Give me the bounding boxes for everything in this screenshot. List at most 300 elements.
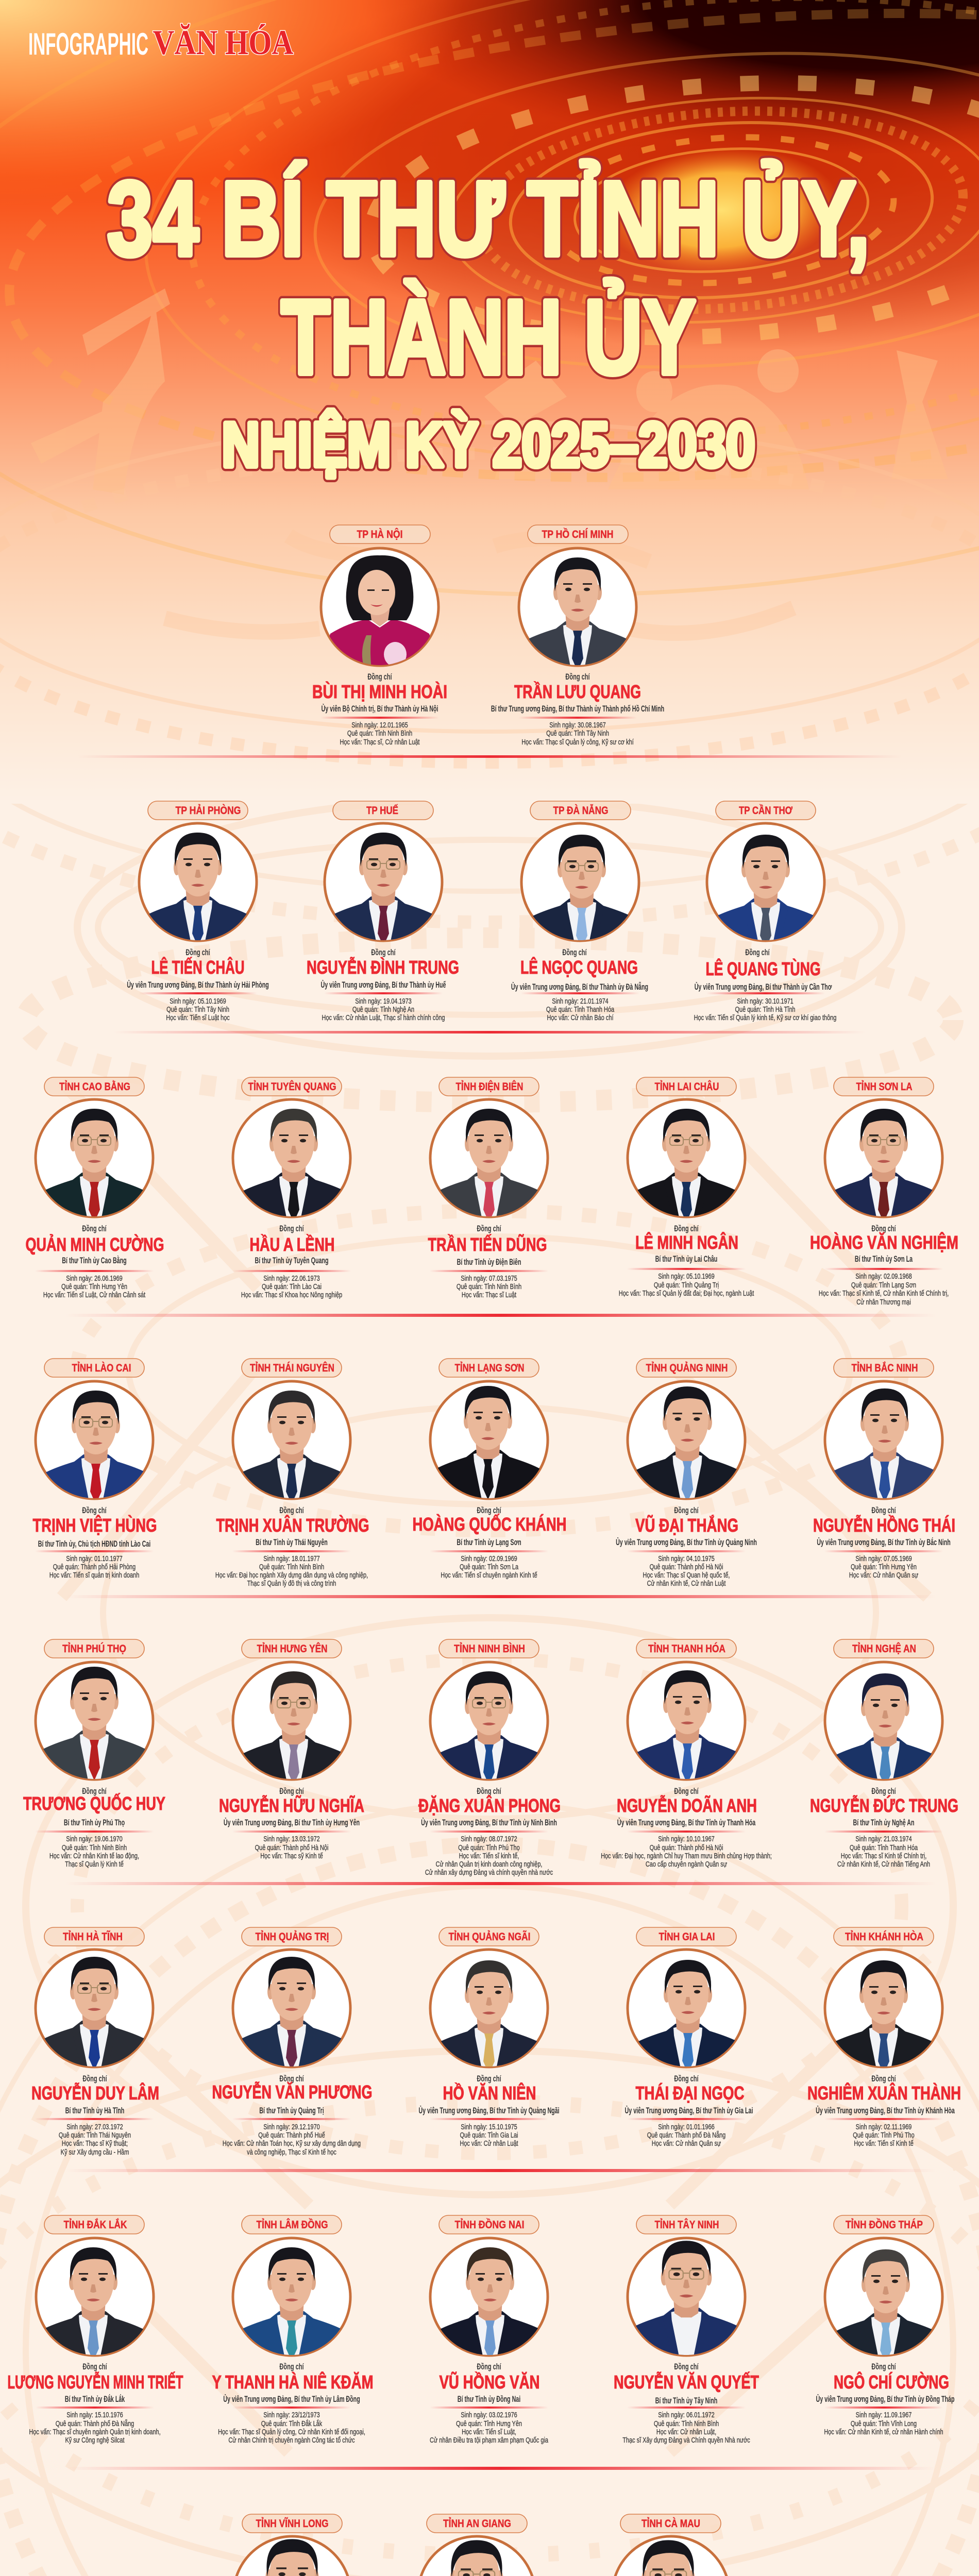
bio: [853, 2122, 915, 2147]
name: [636, 2074, 744, 2104]
bio: Sinh ngày: 19.04.1973: [355, 996, 412, 1005]
pill: TỈNH CÀ MAU: [642, 2518, 700, 2530]
role: Ủy viên Trung ương Đảng, Bí thư Thành ủy Đà Nẵng: [511, 981, 648, 992]
bio: Học vấn: Thạc sĩ Khoa học Nông nghiệp: [241, 1290, 342, 1299]
bio: [29, 2410, 161, 2444]
role: Bí thư Tỉnh ủy Lạng Sơn: [457, 1538, 521, 1548]
bio: [601, 1834, 772, 1868]
bio: Quê quán: Tỉnh Thanh Hóa: [546, 1005, 615, 1013]
bio: Học vấn: Cử nhân Quân sự: [652, 2139, 721, 2147]
pill: TỈNH TUYÊN QUANG: [248, 1080, 336, 1093]
pill: TỈNH TÂY NINH: [654, 2218, 719, 2231]
bio: Sinh ngày: 21.01.1974: [552, 996, 609, 1005]
bio: Sinh ngày: 12.01.1965: [351, 720, 408, 729]
pill: TỈNH VĨNH LONG: [256, 2518, 329, 2530]
role: Ủy viên Trung ương Đảng, Bí thư Tỉnh ủy Quảng Ninh: [616, 1536, 757, 1548]
panel: Tỉnh An Giang: [404, 2514, 549, 2576]
bio: Quê quán: Tỉnh Tây Ninh: [166, 1005, 229, 1013]
role: Bí thư Tỉnh ủy Phú Thọ: [64, 1818, 125, 1828]
pill: [636, 2215, 736, 2234]
pill: TỈNH BẮC NINH: [851, 1362, 918, 1374]
panel: TP Huế: [307, 801, 459, 1022]
bio: Sinh ngày: 07.03.1975: [461, 1274, 517, 1282]
portrait: [231, 2238, 352, 2361]
role: Ủy viên Trung ương Đảng, Bí thư Thành ủy Cần Thơ: [695, 981, 832, 992]
logo: Infographic Văn Hóa: VĂN HÓA: [153, 23, 294, 62]
bio: Học vấn: Cử nhân Quân sự: [849, 1570, 918, 1579]
name: Đồng chí: [82, 1787, 107, 1797]
background pattern: drum motifs: [0, 520, 979, 2576]
portrait: [33, 1950, 155, 2071]
panel: Tỉnh Vĩnh Long: [225, 2514, 359, 2576]
pill: TP ĐÀ NẴNG: [553, 805, 608, 817]
pill: [834, 1639, 934, 1658]
bio: Quê quán: Tỉnh Ninh Bình: [347, 728, 412, 737]
panel: Tỉnh Nghệ An: [810, 1639, 958, 1868]
portrait: [626, 1381, 749, 1502]
bio: [215, 1554, 368, 1587]
portrait: [427, 1381, 549, 1500]
pill: [148, 801, 248, 820]
role: Bí thư Tỉnh ủy Tuyên Quang: [255, 1256, 329, 1266]
role: Ủy viên Trung ương Đảng, Bí thư Tỉnh ủy Hưng Yên: [224, 1817, 360, 1828]
pill: TỈNH ĐỒNG NAI: [454, 2218, 525, 2231]
bio: [460, 2122, 518, 2147]
bio: Sinh ngày: 26.06.1969: [66, 1274, 123, 1282]
bio: Học vấn: Thạc sĩ Quan hệ quốc tế,: [643, 1570, 730, 1579]
bio: Sinh ngày: 08.07.1972: [461, 1834, 517, 1843]
bio: Sinh ngày: 29.12.1970: [263, 2122, 320, 2131]
bio: Học vấn: Cử nhân Báo chí: [547, 1013, 614, 1022]
logo: Infographic Văn Hóa: INFOGRAPHIC: [28, 27, 148, 61]
name: [216, 1506, 369, 1536]
pill: TP HỒ CHÍ MINH: [542, 528, 613, 540]
pill: [834, 2215, 934, 2234]
portrait: [225, 2536, 359, 2576]
bio: Sinh ngày: 22.06.1973: [263, 1274, 320, 1282]
pill: TP HẢI PHÒNG: [175, 804, 241, 817]
pill: TỈNH SƠN LA: [856, 1081, 912, 1093]
pill: TỈNH GIA LAI: [659, 1931, 715, 1943]
bio: Quê quán: Tỉnh Nghệ An: [352, 1005, 414, 1013]
bio: Sinh ngày: 21.03.1974: [855, 1834, 912, 1843]
pill: [242, 2514, 342, 2533]
role: Bí thư Tỉnh ủy Đồng Nai: [458, 2395, 520, 2404]
panel: Tỉnh Cà Mau: [601, 2514, 735, 2576]
portrait: [233, 1099, 355, 1223]
bio: Học vấn: Thạc sĩ Kinh tế, Cử nhân Kinh tế Chính trị,: [819, 1289, 949, 1297]
pill: [242, 1359, 342, 1377]
pill: [834, 1077, 934, 1096]
name: THÁI ĐẠI NGỌC: [636, 2082, 744, 2104]
bio: Quê quán: Thành phố Hải Phòng: [53, 1562, 136, 1571]
bio: Học vấn: Tiến sĩ kinh tế,: [459, 1851, 519, 1860]
name: Đồng chí: [279, 2362, 304, 2372]
bio: Quê quán: Tỉnh Lào Cai: [262, 1282, 322, 1291]
panel: TP Cần Thơ: [694, 801, 836, 1022]
panel: Tỉnh Tuyên Quang: [232, 1077, 355, 1299]
panel: Tỉnh Thái Nguyên: [215, 1359, 369, 1587]
bio: Học vấn: Thạc sĩ, Cử nhân Luật: [340, 737, 420, 746]
bio: Học vấn: Thạc sĩ Kinh tế Chính trị,: [841, 1851, 926, 1860]
bio: [837, 1834, 930, 1868]
bio: Học vấn: Thạc sĩ Quản lý công, Kỹ sư cơ khí: [521, 737, 634, 746]
pill: [834, 1359, 934, 1377]
name: Đồng chí: [82, 1506, 107, 1516]
name: Đồng chí: [477, 2074, 501, 2084]
portrait: [137, 823, 259, 946]
pill: TỈNH LÂM ĐỒNG: [257, 2218, 328, 2231]
panel: Tỉnh Khánh Hòa: [807, 1927, 961, 2147]
portrait: [627, 1662, 748, 1784]
portrait: [428, 1950, 550, 2074]
portrait: [622, 2238, 750, 2360]
role: Bí thư Tỉnh ủy Hà Tĩnh: [65, 2106, 124, 2116]
portrait: [35, 1381, 157, 1504]
role: Bí thư Tỉnh ủy Đắk Lắk: [65, 2393, 125, 2404]
panel: Tỉnh Cao Bằng: [26, 1077, 164, 1299]
pill: [636, 1077, 736, 1096]
bio: Sinh ngày: 27.03.1972: [66, 2122, 123, 2131]
bio: Sinh ngày: 05.10.1969: [658, 1272, 715, 1280]
panel: Tỉnh Lai Châu: [619, 1077, 754, 1297]
bio: Sinh ngày: 30.10.1971: [737, 996, 794, 1005]
bio: Học vấn: Thạc sĩ Quản lý đất đai; Đại học, ngành Luật: [619, 1289, 754, 1297]
bio: Sinh ngày: 11.09.1967: [856, 2410, 912, 2419]
bio: Quê quán: Thành phố Hà Nội: [255, 1843, 328, 1852]
bio: Quê quán: Tỉnh Hà Tĩnh: [735, 1005, 796, 1013]
name: LÊ NGỌC QUANG: [520, 956, 638, 978]
bio: Học vấn: Tiến sĩ Kinh tế: [854, 2139, 914, 2147]
name: [807, 2074, 961, 2104]
pill: TỈNH THÁI NGUYÊN: [250, 1362, 334, 1374]
bio: Sinh ngày: 30.08.1967: [549, 720, 606, 729]
portrait: [823, 1950, 944, 2074]
role: Ủy viên Trung ương Đảng, Bí thư Tỉnh ủy Gia Lai: [625, 2105, 753, 2116]
bio: Quê quán: Tỉnh Ninh Bình: [259, 1562, 324, 1571]
bio: [166, 996, 230, 1022]
bio: [59, 2122, 131, 2156]
bio: Sinh ngày: 02.09.1969: [461, 1554, 517, 1563]
bio: Cử nhân Thương mại: [856, 1297, 911, 1306]
bio: Quê quán: Tỉnh Hưng Yên: [851, 1562, 917, 1571]
name: QUẢN MINH CƯỜNG: [26, 1233, 164, 1255]
pill: [44, 1639, 144, 1658]
hero background with drum artwork: [0, 0, 979, 804]
bio: Cử nhân Chính trị chuyên ngành Công tác tổ chức: [228, 2435, 355, 2444]
name: TRẦN LƯU QUANG: [514, 681, 641, 702]
name: NGUYỄN ĐÌNH TRUNG: [307, 956, 459, 978]
pill: TỈNH CAO BẰNG: [59, 1080, 130, 1093]
pill: TỈNH LÀO CAI: [72, 1362, 131, 1374]
panel: TP Hà Nội: [312, 525, 447, 746]
name: [249, 1224, 335, 1255]
portrait: [231, 1381, 352, 1504]
pill: [636, 1359, 736, 1377]
portrait: [410, 2536, 544, 2576]
panel: Tỉnh Hưng Yên: [219, 1639, 364, 1860]
bio: Sinh ngày: 13.03.1972: [263, 1834, 320, 1843]
name: NGUYỄN DOÃN ANH: [617, 1794, 757, 1816]
name: Đồng chí: [279, 1224, 304, 1234]
name: HẦU A LỀNH: [249, 1234, 335, 1255]
name: HOÀNG QUỐC KHÁNH: [412, 1513, 567, 1535]
bio: Sinh ngày: 19.06.1970: [66, 1834, 123, 1843]
bio: [521, 720, 634, 746]
portrait: [429, 2238, 551, 2361]
role: Bí thư Tỉnh ủy Thái Nguyên: [256, 1538, 328, 1548]
pill: [439, 1359, 539, 1377]
bio: Sinh ngày: 03.02.1976: [461, 2410, 517, 2419]
role: Ủy viên Trung ương Đảng, Bí thư Tỉnh ủy Lâm Đồng: [223, 2393, 360, 2404]
bio: [622, 2410, 750, 2444]
name: [635, 1506, 738, 1536]
name: NGUYỄN VĂN QUYẾT: [614, 2371, 759, 2393]
panel: Tỉnh Lạng Sơn: [412, 1359, 567, 1579]
panel: Tỉnh Hà Tĩnh: [31, 1927, 159, 2156]
name: [813, 1506, 955, 1536]
name: TRẦN TIẾN DŨNG: [428, 1233, 547, 1255]
bio: Quê quán: Tỉnh Sơn La: [460, 1562, 519, 1571]
bio: [441, 1554, 537, 1579]
pill: [716, 801, 816, 820]
name: ĐẶNG XUÂN PHONG: [418, 1794, 561, 1816]
bio: Quê quán: Thành phố Hà Nội: [650, 1843, 723, 1852]
bio: Quê quán: Tỉnh Quảng Trị: [654, 1280, 719, 1289]
bio: Học vấn: Cử nhân Luật: [460, 2139, 518, 2147]
bio: Quê quán: Tỉnh Hưng Yên: [61, 1282, 127, 1291]
bio: Quê quán: Tỉnh Ninh Bình: [457, 1282, 521, 1291]
pill: TP HUẾ: [366, 805, 398, 817]
role: Bí thư Tỉnh ủy Quảng Trị: [259, 2106, 324, 2116]
bio: [241, 1274, 342, 1299]
pill: TỈNH KHÁNH HÒA: [845, 1930, 923, 1943]
bio: Học vấn: Tiến sĩ quản trị kinh doanh: [49, 1570, 139, 1579]
bio: Học vấn: Thạc sĩ Kỹ thuật;: [62, 2139, 128, 2147]
name: NGUYỄN DUY LÂM: [31, 2082, 159, 2104]
role: Bí thư Tỉnh ủy Sơn La: [855, 1255, 913, 1264]
pill: [439, 1927, 539, 1946]
bio: [43, 1274, 145, 1299]
bio: Sinh ngày: 23/12/1973: [263, 2410, 320, 2419]
bio: Sinh ngày: 15.10.1976: [66, 2410, 123, 2419]
pill: [242, 2215, 342, 2234]
name: Đồng chí: [674, 1224, 699, 1234]
pill: TỈNH ĐIỆN BIÊN: [455, 1080, 524, 1093]
name: LƯƠNG NGUYỄN MINH TRIẾT: [7, 2371, 183, 2393]
bio: [322, 996, 445, 1022]
name: Y THANH HÀ NIÊ KĐĂM: [212, 2371, 373, 2393]
panel: Tỉnh Quảng Ngãi: [418, 1927, 560, 2147]
pill: TP HÀ NỘI: [357, 528, 403, 540]
pill: [242, 1639, 342, 1658]
name: [520, 948, 638, 978]
panel: Tỉnh Thanh Hóa: [601, 1639, 772, 1868]
bio: Quê quán: Thành phố Huế: [258, 2130, 325, 2139]
name: Đồng chí: [279, 1506, 304, 1516]
name: [23, 1787, 165, 1814]
name: Đồng chí: [82, 1224, 107, 1234]
name: [810, 1787, 958, 1816]
title: THÀNH ỦY: [281, 278, 696, 396]
name: Đồng chí: [674, 2074, 699, 2084]
bio: Học vấn: Cử nhân Kinh tế, cử nhân Hành chính: [824, 2427, 943, 2436]
portrait: [32, 2238, 154, 2361]
panel: Tỉnh Sơn La: [810, 1077, 958, 1306]
bio: Sinh ngày: 02.09.1968: [855, 1272, 912, 1280]
bio: Quê quán: Tỉnh Gia Lai: [460, 2130, 518, 2139]
bio: [694, 996, 836, 1022]
bio: Thạc sĩ Quản lý đô thị và công trình: [247, 1579, 336, 1587]
pill: TỈNH QUẢNG TRỊ: [256, 1931, 329, 1943]
bio: [619, 1272, 754, 1297]
name: Đồng chí: [871, 2074, 896, 2084]
pill: [333, 801, 433, 820]
panel: Tỉnh Đồng Tháp: [816, 2215, 955, 2436]
name: Đồng chí: [185, 948, 210, 958]
role: Bí thư Tỉnh ủy Nghệ An: [853, 1818, 915, 1828]
name: [635, 1224, 738, 1253]
portrait: [521, 823, 643, 948]
bio: Quê quán: Tỉnh Ninh Bình: [654, 2419, 719, 2428]
name: [514, 672, 641, 702]
panel: TP Hải Phòng: [127, 801, 269, 1022]
bio: Học vấn: Tiến sĩ Luật học: [166, 1013, 230, 1022]
role: Ủy viên Bộ Chính trị, Bí thư Thành ủy Hà Nội: [322, 703, 438, 714]
bio: Học vấn: Thạc sĩ Quản lý công, Cử nhân Kinh tế đối ngoại,: [218, 2427, 365, 2436]
name: [151, 948, 244, 978]
name: Đồng chí: [674, 1787, 699, 1797]
role: Bí thư Tỉnh ủy, Chủ tịch HĐND tỉnh Lào Cai: [38, 1539, 150, 1549]
bio: Sinh ngày: 10.10.1967: [658, 1834, 715, 1843]
pill: TỈNH PHÚ THỌ: [62, 1642, 126, 1655]
bio: [643, 1554, 730, 1587]
bio: Cử nhân Kinh tế, Cử nhân Luật: [647, 1579, 726, 1587]
pill: TỈNH LAI CHÂU: [654, 1080, 719, 1093]
name: TRỊNH XUÂN TRƯỜNG: [216, 1514, 369, 1536]
name: Đồng chí: [871, 2362, 896, 2372]
bio: [819, 1272, 949, 1306]
role: Bí thư Tỉnh ủy Lai Châu: [655, 1255, 717, 1264]
bio: và công nghiệp, Thạc sĩ Kinh tế học: [247, 2147, 336, 2156]
panel: Tỉnh Lâm Đồng: [212, 2215, 373, 2444]
bio: [49, 1554, 139, 1579]
bio: Sinh ngày: 05.10.1969: [170, 996, 226, 1005]
name: BÙI THỊ MINH HOÀI: [312, 681, 447, 702]
pill: [636, 1639, 736, 1658]
portrait: [627, 1950, 749, 2074]
panel: Tỉnh Ninh Bình: [418, 1639, 561, 1876]
name: Đồng chí: [871, 1506, 896, 1516]
bio: Quê quán: Tỉnh Thái Nguyên: [59, 2130, 131, 2139]
portrait: [428, 1662, 550, 1785]
name: [307, 948, 459, 978]
bio: Học vấn: Đại học ngành Xây dựng dân dụng và công nghiệp,: [215, 1570, 368, 1579]
bio: Học vấn: Thạc sĩ Luật: [462, 1290, 516, 1299]
bio: Cử nhân Điều tra tội phạm xâm phạm Quốc gia: [430, 2435, 549, 2444]
name: [834, 2362, 949, 2393]
name: Đồng chí: [674, 1506, 699, 1516]
name: VŨ ĐẠI THẮNG: [635, 1514, 738, 1536]
name: Đồng chí: [367, 672, 392, 682]
portrait: [601, 2536, 735, 2576]
portrait: [233, 1662, 355, 1785]
name: [706, 948, 820, 979]
bio: [340, 720, 420, 746]
name: [617, 1787, 757, 1816]
bio: [647, 2122, 725, 2147]
name: NGUYỄN HỮU NGHĨA: [219, 1794, 364, 1816]
bio: [425, 1834, 553, 1876]
bio: Kỹ sư Xây dựng cầu - Hầm: [61, 2147, 129, 2156]
name: VŨ HỒNG VĂN: [439, 2371, 540, 2393]
bio: Sinh ngày: 15.10.1975: [461, 2122, 517, 2131]
pill: [439, 1077, 539, 1096]
panel: Tỉnh Điện Biên: [428, 1077, 550, 1299]
pill: [44, 1077, 144, 1096]
name: Đồng chí: [82, 2074, 107, 2084]
pill: [44, 2215, 144, 2234]
pill: [439, 1639, 539, 1658]
bio: [546, 996, 615, 1022]
role: Bí thư Tỉnh ủy Tây Ninh: [655, 2396, 717, 2406]
name: [212, 2074, 372, 2103]
bio: Quê quán: Tỉnh Phú Thọ: [458, 1843, 520, 1852]
bio: Quê quán: Tỉnh Ninh Bình: [62, 1843, 127, 1852]
pill: TỈNH HƯNG YÊN: [257, 1642, 328, 1655]
role: Ủy viên Trung ương Đảng, Bí thư Tỉnh ủy Ninh Bình: [421, 1817, 557, 1828]
portrait: [824, 1381, 946, 1502]
bio: Quê quán: Tỉnh Hưng Yên: [456, 2419, 522, 2428]
bio: Học vấn: Cử nhân Luật, Thạc sĩ hành chính công: [322, 1013, 445, 1022]
bio: [223, 2122, 361, 2156]
pill: [44, 1927, 144, 1946]
pill: TỈNH AN GIANG: [443, 2518, 511, 2530]
panel: Tỉnh Quảng Ninh: [616, 1359, 757, 1587]
pill: [439, 2215, 539, 2234]
bio: Quê quán: Tỉnh Lạng Sơn: [851, 1280, 916, 1289]
role: Ủy viên Trung ương Đảng, Bí thư Thành ủy Huế: [321, 979, 446, 990]
panel: Tỉnh Gia Lai: [625, 1927, 753, 2147]
bio: Học vấn: Tiến sĩ Luật,: [462, 2427, 516, 2436]
bio: [824, 2410, 943, 2436]
pill: TỈNH THANH HÓA: [648, 1642, 725, 1655]
bio: Quê quán: Tỉnh Đắk Lắk: [261, 2419, 323, 2428]
role: Ủy viên Trung ương Đảng, Bí thư Tỉnh ủy Bắc Ninh: [817, 1536, 951, 1548]
panel: Tỉnh Đồng Nai: [429, 2215, 551, 2444]
bio: Cao cấp chuyên ngành Quân sự: [646, 1859, 727, 1868]
bio: Thạc sĩ Xây dựng Đảng và Chính quyền Nhà nước: [622, 2435, 750, 2444]
name: [428, 1224, 547, 1255]
bio: Thạc sĩ Quản lý Kinh tế: [65, 1859, 124, 1868]
bio: Sinh ngày: 01.10.1977: [66, 1554, 123, 1563]
bio: Học vấn: Cử nhân Luật,: [656, 2427, 716, 2436]
portrait: [517, 548, 638, 671]
name: Đồng chí: [871, 1224, 896, 1234]
name: Đồng chí: [745, 948, 770, 958]
panel: Tỉnh Tây Ninh: [614, 2215, 759, 2444]
title: THÀNH ỦY: [281, 278, 696, 396]
bio: [255, 1834, 328, 1860]
role: Ủy viên Trung ương Đảng, Bí thư Thành ủy Hải Phòng: [127, 979, 269, 990]
name: [26, 1224, 164, 1255]
portrait: [825, 2238, 947, 2363]
bio: Quê quán: Tỉnh Vĩnh Long: [851, 2419, 917, 2428]
pill: TỈNH ĐỒNG THÁP: [846, 2218, 923, 2231]
name: [614, 2362, 759, 2393]
title: [107, 160, 870, 480]
panel: Tỉnh Bắc Ninh: [813, 1359, 955, 1579]
